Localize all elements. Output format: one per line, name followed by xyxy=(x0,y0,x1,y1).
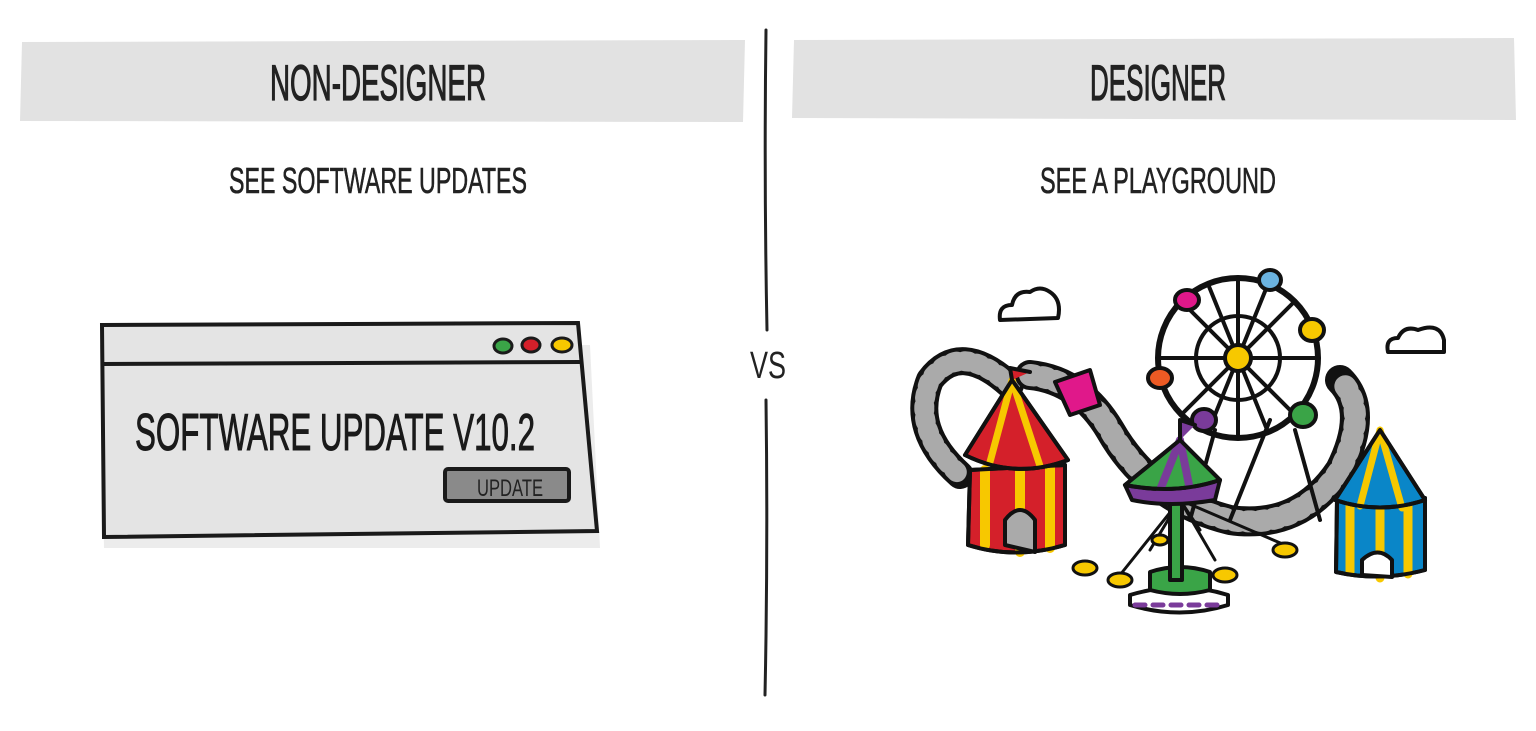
blue tent xyxy=(1335,430,1425,578)
header: designer: DESIGNER xyxy=(1090,55,1226,111)
clouds xyxy=(1000,288,1444,352)
coaster car xyxy=(1055,370,1100,415)
red tent xyxy=(965,368,1068,552)
header: designer xyxy=(792,38,1516,120)
divider line xyxy=(765,30,767,695)
subtitle: see software updates: SEE SOFTWARE UPDATES xyxy=(229,160,527,201)
header: non-designer: NON-DESIGNER xyxy=(270,55,486,111)
gondolas xyxy=(1148,270,1324,431)
carousel xyxy=(1073,420,1297,612)
update text: SOFTWARE UPDATE V10.2 xyxy=(135,404,535,462)
ferris wheel xyxy=(1158,278,1320,520)
header: non-designer xyxy=(20,40,745,122)
window buttons xyxy=(494,338,572,353)
vs label: VS xyxy=(750,345,786,387)
update button xyxy=(445,469,569,502)
playground illustration xyxy=(924,270,1444,612)
update button: UPDATE xyxy=(477,475,543,502)
software update window xyxy=(100,323,600,548)
coaster track xyxy=(924,361,1355,521)
subtitle: see a playground: SEE A PLAYGROUND xyxy=(1040,160,1276,201)
